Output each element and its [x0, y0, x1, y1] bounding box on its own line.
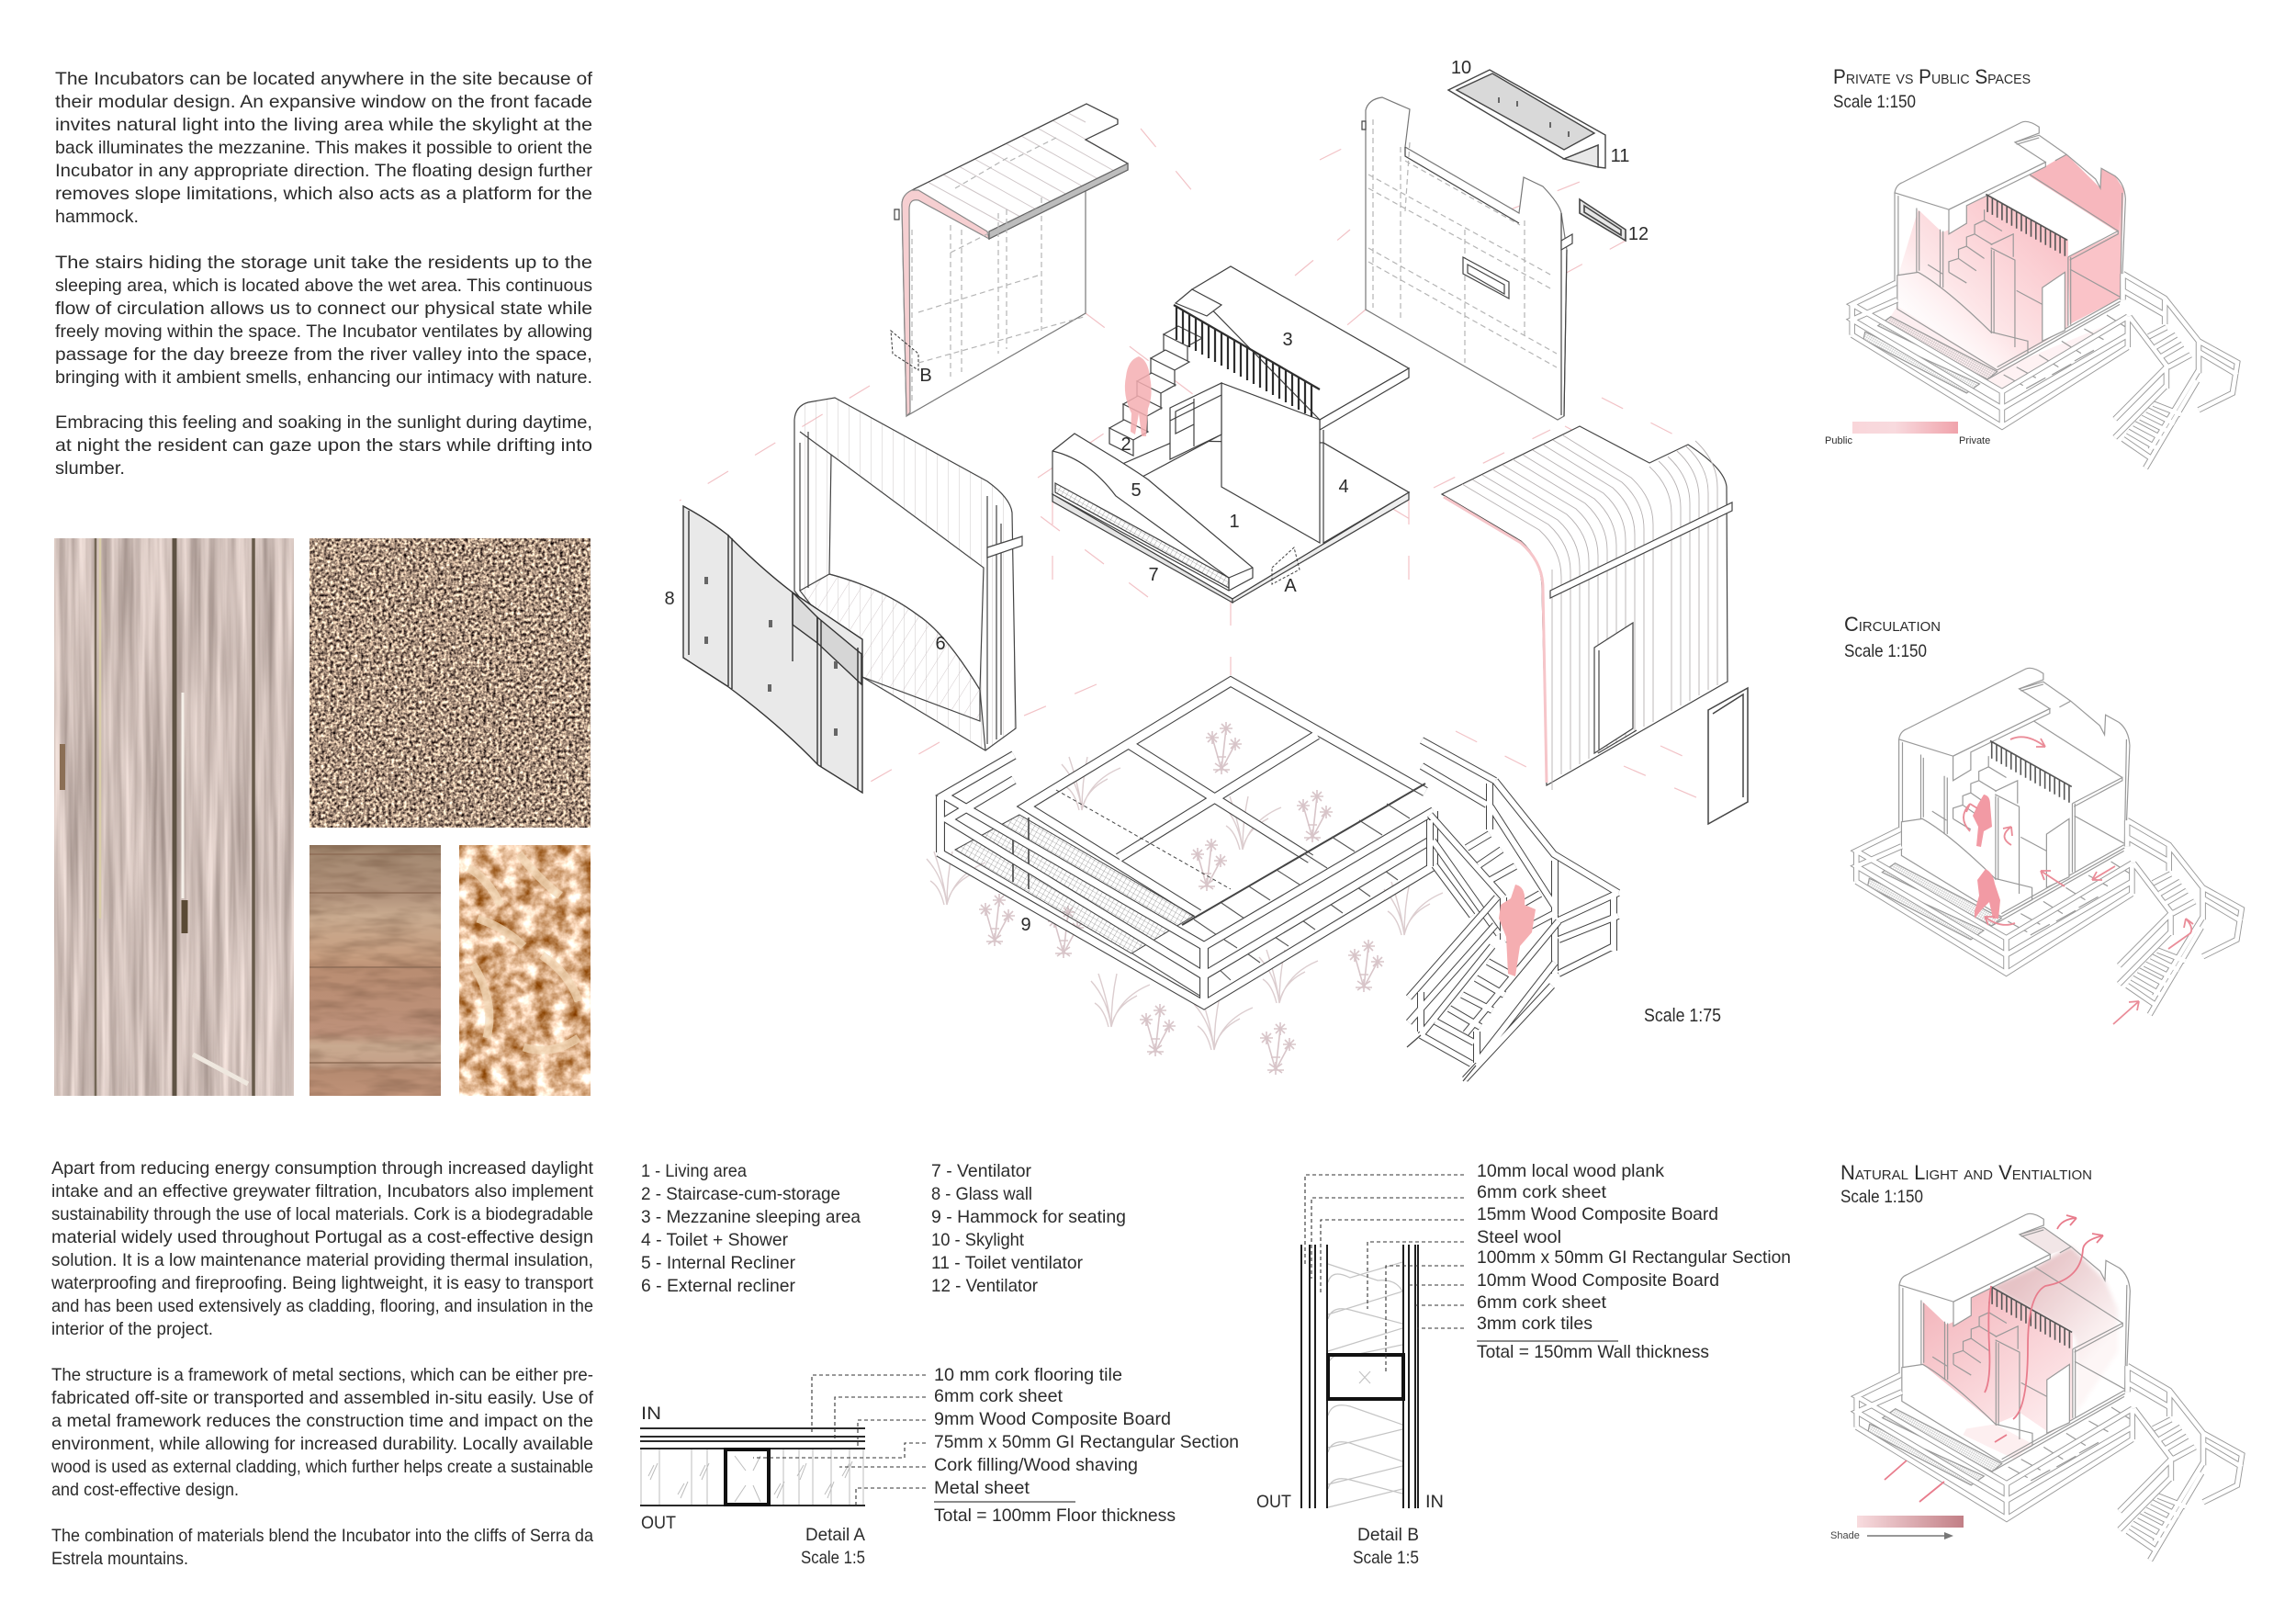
human figure: stairs — [1125, 356, 1152, 436]
detail B notes: 6mm cork sheet — [1477, 1292, 1607, 1313]
legend: numbered spaces: 4 - Toilet + Shower — [641, 1230, 788, 1250]
drawing callout numbers: 4 — [1338, 477, 1349, 497]
panel: circulation — [1844, 613, 2242, 1024]
panel: natural light and ventilation — [1830, 1161, 2242, 1561]
text block: materials: waterproofing and fireproofing. Being lightweight, it is easy to transport — [51, 1273, 594, 1293]
material swatch: wood planks — [54, 538, 294, 1096]
isometric diagram with private gradient — [1852, 121, 2237, 468]
wall panel: upper right — [1362, 97, 1572, 420]
text block: materials: material widely used throughout Portugal as a cost-effective design — [51, 1227, 593, 1247]
deck rails — [939, 755, 1434, 1005]
text block: intro: slumber. — [55, 458, 125, 479]
roof and wall panel: upper left — [891, 104, 1128, 416]
drawing callout numbers: 7 — [1148, 565, 1159, 585]
detail A: floor section — [640, 1375, 926, 1506]
material swatch: rammed earth — [310, 845, 441, 1096]
text block: materials: fabricated off-site or transported and assembled in-situ easily. Use of — [51, 1388, 594, 1408]
text block: materials: environment, while allowing for increased durability. Locally available — [51, 1434, 593, 1454]
glass wall — [683, 506, 862, 793]
text block: materials: and has been used extensively as cladding, flooring, and insulation in the — [51, 1296, 593, 1316]
detail B notes — [1256, 1161, 1791, 1568]
legend: numbered spaces: 5 - Internal Recliner — [641, 1253, 795, 1273]
detail B notes: 10mm Wood Composite Board — [1477, 1270, 1719, 1291]
drawing callout numbers: 1 — [1229, 512, 1240, 532]
detail A notes: Total = 100mm Floor thickness — [934, 1506, 1176, 1526]
legend: numbered spaces: 3 - Mezzanine sleeping area — [641, 1207, 861, 1227]
ventilation arrows — [1885, 1215, 2103, 1502]
deck staircase — [1407, 740, 1618, 1081]
drawing callout numbers: 6 — [935, 634, 946, 654]
detail A notes: OUT — [641, 1513, 676, 1533]
legend: numbered spaces: 7 - Ventilator — [931, 1161, 1031, 1181]
drawing callout numbers: 8 — [664, 589, 675, 609]
floor plate — [1052, 441, 1409, 599]
drawing callout numbers: A — [1284, 576, 1297, 596]
window frame wall with external recliner — [794, 398, 1022, 750]
detail B notes: Scale 1:5 — [1353, 1548, 1419, 1568]
storage and stairs — [1109, 326, 1221, 459]
text block: materials: solution. It is a low maintenance material providing thermal insulation, — [51, 1250, 593, 1270]
legend: numbered spaces — [641, 1161, 1126, 1296]
human figures — [1973, 795, 2000, 919]
text block: intro: bringing with it ambient smells, enhancing our intimacy with nature. — [55, 367, 592, 388]
heading: Scale 1:150 — [1844, 641, 1927, 661]
detail A notes: 10 mm cork flooring tile — [934, 1365, 1122, 1385]
detail A notes: Detail A — [805, 1525, 865, 1545]
drawing callout numbers: 2 — [1120, 434, 1131, 455]
panel: private vs public spaces — [1825, 65, 2237, 468]
detail A notes: Metal sheet — [934, 1478, 1030, 1498]
detail B notes: Total = 150mm Wall thickness — [1477, 1342, 1709, 1362]
drawing callout numbers: 9 — [1020, 915, 1031, 935]
material swatch: wood shavings — [459, 845, 591, 1096]
skylight — [1448, 70, 1605, 168]
heading — [1840, 1161, 2092, 1207]
text block: intro: at night the resident can gaze upon the stars while drifting into — [55, 435, 592, 456]
legend: public to private: Public — [1825, 435, 1852, 446]
legend: numbered spaces: 9 - Hammock for seating — [931, 1207, 1126, 1227]
isometric diagram — [1856, 668, 2242, 1015]
detail A notes: Cork filling/Wood shaving — [934, 1455, 1138, 1475]
text block: intro: The stairs hiding the storage unit take the residents up to the — [55, 253, 592, 273]
mezzanine railing — [1174, 305, 1320, 417]
text block: materials: sustainability through the use of local materials. Cork is a biodegradable — [51, 1204, 593, 1224]
detail B notes: IN — [1425, 1492, 1444, 1512]
detail B notes: 10mm local wood plank — [1477, 1161, 1664, 1181]
isometric diagram with shade — [1857, 1213, 2242, 1561]
legend: shade: Shade — [1830, 1530, 1860, 1541]
text block: intro: passage for the day breeze from the river valley into the space, — [55, 344, 592, 365]
hammock mesh — [955, 815, 1194, 953]
text block: intro: freely moving within the space. The Incubator ventilates by allowing — [55, 321, 592, 342]
text block: materials: The combination of materials blend the Incubator into the cliffs of Serra da — [51, 1526, 593, 1546]
heading — [1833, 65, 2031, 112]
legend: shade — [1830, 1516, 1964, 1541]
heading: Scale 1:150 — [1833, 92, 1916, 112]
legend: numbered spaces: 11 - Toilet ventilator — [931, 1253, 1083, 1273]
partition walls — [1221, 383, 1320, 543]
drawing callout numbers: 10 — [1451, 58, 1471, 78]
drawing callout numbers: B — [919, 366, 932, 386]
mezzanine slab — [1192, 266, 1409, 420]
legend: numbered spaces: 8 - Glass wall — [931, 1184, 1032, 1204]
detail A notes — [641, 1365, 1239, 1568]
drawing callout numbers — [664, 58, 1649, 935]
detail B notes: Steel wool — [1477, 1227, 1561, 1247]
text block: materials: interior of the project. — [51, 1319, 213, 1339]
heading: Circulation — [1844, 613, 1941, 636]
text block: materials: a metal framework reduces the construction time and impact on the — [51, 1411, 593, 1431]
text block: intro: back illuminates the mezzanine. This makes it possible to orient the — [55, 138, 592, 158]
scale note: Scale 1:75 — [1644, 1006, 1721, 1026]
detail B notes: 100mm x 50mm GI Rectangular Section — [1477, 1247, 1791, 1268]
text block: intro: sleeping area, which is located above the wet area. This continuous — [55, 276, 592, 296]
deck platform — [939, 682, 1434, 1005]
text block: intro: The Incubators can be located anywhere in the site because of — [55, 69, 593, 89]
heading — [1844, 613, 1941, 661]
circulation arrows — [1964, 737, 2193, 1024]
detail B notes: Detail B — [1357, 1525, 1419, 1545]
heading: Private vs Public Spaces — [1833, 65, 2031, 88]
text block: intro: Embracing this feeling and soaking in the sunlight during daytime, — [55, 412, 592, 433]
material swatch: cork — [310, 538, 591, 828]
detail B: wall section — [1301, 1175, 1464, 1508]
ventilator 12 — [1580, 199, 1626, 241]
text block: materials — [51, 1158, 594, 1569]
heading: Natural Light and Ventialtion — [1840, 1161, 2092, 1184]
detail A notes: IN — [641, 1404, 661, 1424]
heading: Scale 1:150 — [1840, 1187, 1923, 1207]
detail B notes: 6mm cork sheet — [1477, 1182, 1607, 1202]
landscape plants — [927, 722, 1443, 1075]
detail A notes: 75mm x 50mm GI Rectangular Section — [934, 1432, 1239, 1452]
legend: numbered spaces: 1 - Living area — [641, 1161, 747, 1181]
exterior door panel — [1708, 688, 1748, 824]
detail A notes: 9mm Wood Composite Board — [934, 1409, 1171, 1429]
text block: materials: and cost-effective design. — [51, 1480, 239, 1500]
drawing callout numbers: 3 — [1282, 330, 1293, 350]
exterior wall with door: front right — [1442, 426, 1732, 790]
detail A notes: 6mm cork sheet — [934, 1386, 1064, 1406]
legend: public to private: Private — [1959, 435, 1990, 446]
text block: intro — [55, 69, 593, 479]
legend: numbered spaces: 6 - External recliner — [641, 1276, 795, 1296]
deck boards — [1182, 784, 1425, 925]
text block: materials: Apart from reducing energy consumption through increased daylight — [51, 1158, 594, 1179]
exploded axonometric guide lines — [680, 129, 1705, 801]
text block: intro: invites natural light into the living area while the skylight at the — [55, 115, 592, 135]
legend: numbered spaces: 12 - Ventilator — [931, 1276, 1038, 1296]
interior module — [1052, 266, 1409, 603]
drawing callout numbers: 12 — [1628, 224, 1649, 244]
drawing callout numbers: 5 — [1131, 480, 1142, 501]
text block: intro: hammock. — [55, 207, 139, 227]
text block: intro: flow of circulation allows us to connect our physical state while — [55, 299, 592, 319]
legend: public to private — [1825, 422, 1990, 446]
detail B notes: 3mm cork tiles — [1477, 1314, 1593, 1334]
text block: intro: Incubator in any appropriate direction. The floating design further — [55, 161, 593, 181]
text block: materials: wood is used as external cladding, which further helps create a sustainable — [51, 1457, 593, 1477]
legend: numbered spaces: 10 - Skylight — [931, 1230, 1025, 1250]
drawing callout numbers: 11 — [1611, 146, 1629, 166]
text block: materials: Estrela mountains. — [51, 1549, 188, 1569]
detail B notes: 15mm Wood Composite Board — [1477, 1204, 1718, 1224]
text block: intro: removes slope limitations, which also acts as a platform for the — [55, 184, 592, 204]
legend: numbered spaces: 2 - Staircase-cum-storage — [641, 1184, 840, 1204]
text block: intro: their modular design. An expansive window on the front facade — [55, 92, 592, 112]
text block: materials: The structure is a framework of metal sections, which can be either pre- — [51, 1365, 593, 1385]
internal recliner — [1052, 434, 1253, 591]
detail A notes: Scale 1:5 — [801, 1548, 865, 1568]
deck beams — [1026, 682, 1425, 914]
detail B notes: OUT — [1256, 1492, 1291, 1512]
human figure: deck stairs — [1499, 885, 1536, 976]
text block: materials: intake and an effective greywater filtration, Incubators also implement — [51, 1181, 594, 1201]
